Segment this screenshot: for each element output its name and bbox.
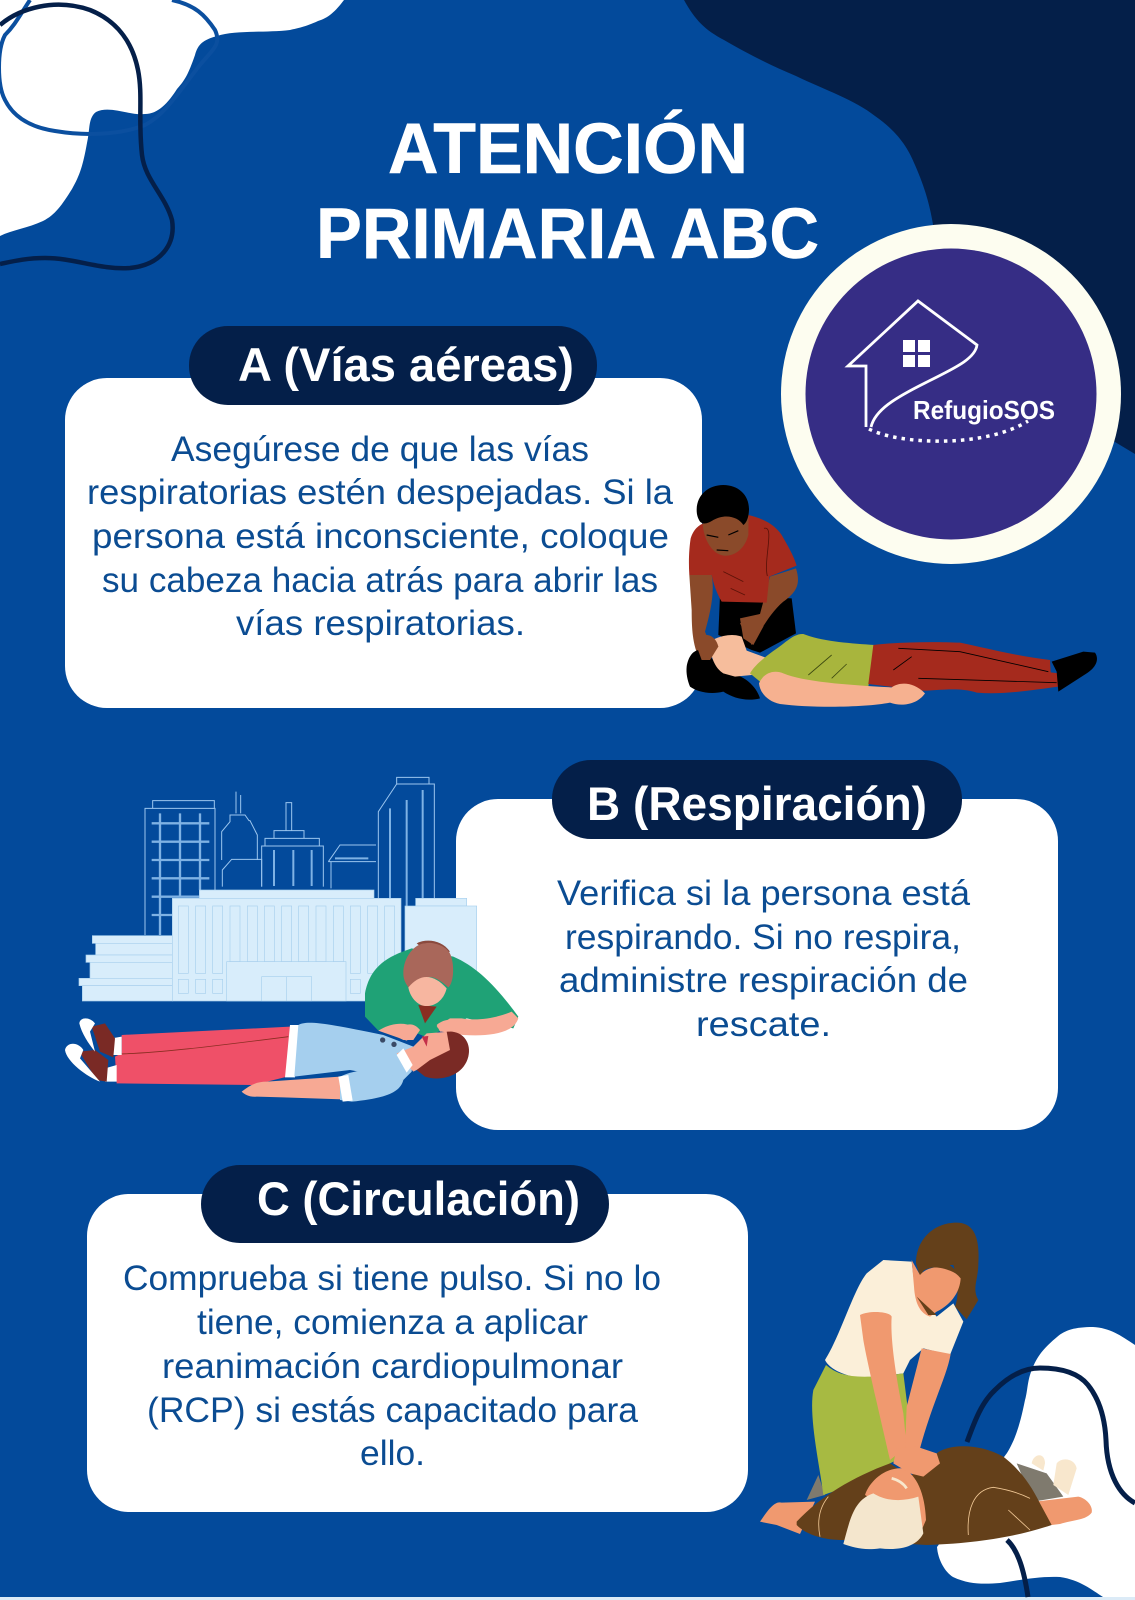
text block: C: reanimación cardiopulmonar bbox=[162, 1347, 623, 1386]
heading pill: C: C (Circulación) bbox=[257, 1172, 580, 1225]
decorative white blob: bottom right bbox=[937, 1327, 1135, 1597]
text block: C: (RCP) si estás capacitado para bbox=[147, 1391, 639, 1430]
title bbox=[316, 110, 819, 274]
heading pill: C bbox=[201, 1165, 609, 1243]
decorative white blob: top left bbox=[0, 0, 344, 236]
text block: C: tiene, comienza a aplicar bbox=[197, 1303, 588, 1342]
text block: C: ello. bbox=[360, 1434, 425, 1473]
logo badge: RefugioSOS: RefugioSOS bbox=[913, 395, 1055, 425]
text block: B: respirando. Si no respira, bbox=[565, 918, 961, 957]
logo badge: RefugioSOS bbox=[781, 224, 1121, 564]
panel: A vías aéreas bbox=[65, 326, 702, 708]
panel: C circulación bbox=[87, 1165, 748, 1512]
panel: B respiración bbox=[456, 760, 1058, 1130]
decorative line: navy curve bottom right bbox=[967, 1368, 1135, 1597]
title: ATENCIÓN bbox=[388, 110, 748, 189]
illustration: chest compressions bbox=[760, 1223, 1092, 1549]
title: PRIMARIA ABC bbox=[316, 195, 819, 274]
heading pill: A bbox=[189, 326, 597, 405]
text block: A: persona está inconsciente, coloque bbox=[92, 517, 669, 556]
text block: A: respiratorias estén despejadas. Si la bbox=[87, 473, 674, 512]
heading pill: A: A (Vías aéreas) bbox=[238, 338, 574, 391]
text block: B: rescate. bbox=[696, 1005, 831, 1044]
text block: A: su cabeza hacia atrás para abrir las bbox=[102, 561, 658, 600]
decorative line: blue curve top left bbox=[0, 0, 217, 134]
text block: B: Verifica si la persona está bbox=[557, 874, 971, 913]
text block: B: administre respiración de bbox=[559, 961, 968, 1000]
text block: C bbox=[123, 1259, 661, 1473]
heading pill: B: B (Respiración) bbox=[587, 777, 927, 830]
illustration: city skyline bbox=[79, 777, 477, 1001]
heading pill: B bbox=[552, 760, 962, 839]
decorative line: navy curve top left bbox=[0, 5, 173, 268]
text block: C: Comprueba si tiene pulso. Si no lo bbox=[123, 1259, 661, 1298]
text block: A bbox=[87, 430, 674, 643]
text block: A: Asegúrese de que las vías bbox=[171, 430, 589, 469]
illustration: rescue breathing bbox=[65, 941, 518, 1102]
text block: B bbox=[557, 874, 971, 1044]
decorative navy blob: top right bbox=[684, 0, 1135, 454]
illustration: opening the airway bbox=[686, 485, 1097, 707]
text block: A: vías respiratorias. bbox=[236, 604, 525, 643]
